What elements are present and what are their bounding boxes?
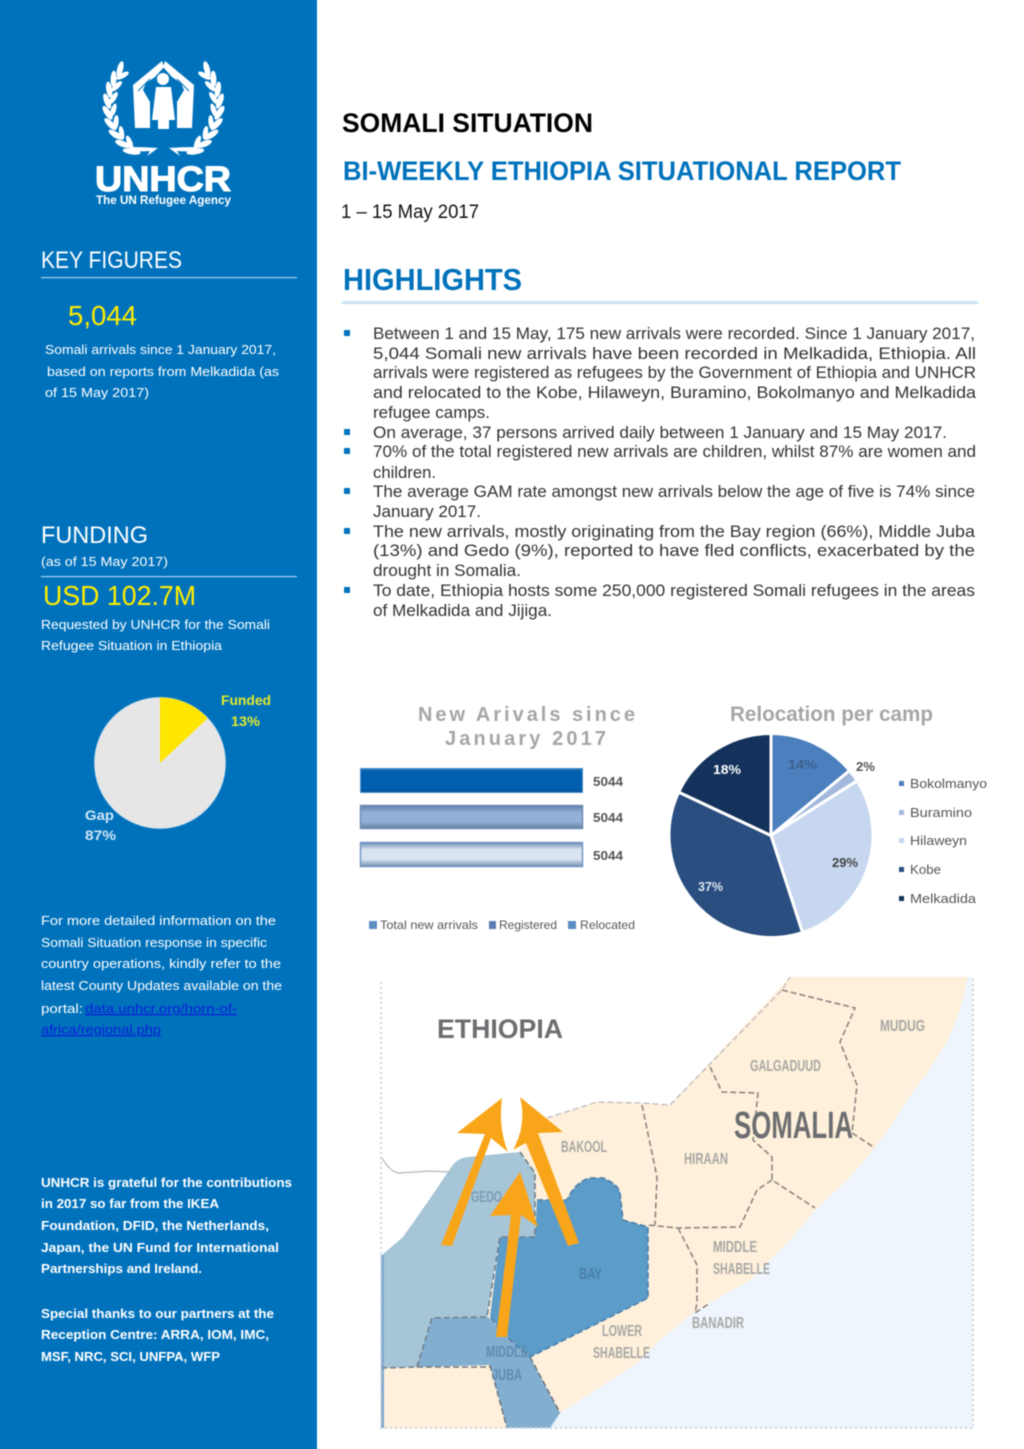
dotted frame: [381, 978, 973, 1428]
left edge strip: [381, 1255, 384, 1428]
text block: highlights list: (13%) and Gedo (9%), reported to have fled conflicts, exacerbated by the: [373, 541, 975, 560]
chart: relocation per camp pie: 18%: [713, 762, 741, 777]
text block: highlights list: On average, 37 persons arrived daily between 1 January and 15 May 2017.: [373, 423, 947, 442]
text: arrivals description: Somali arrivals since 1 January 2017,: [45, 342, 276, 357]
bar: relocated: [360, 842, 582, 866]
legend: camps: Melkadida: [910, 891, 977, 906]
icon: UNHCR logo: UNHCR: [95, 160, 231, 199]
text block: highlights list: arrivals were registered as refugees by the Government of Ethiopia and UNHCR: [373, 363, 976, 382]
text: more information: [41, 913, 282, 1037]
chart: relocation per camp pie: Relocation per camp: [730, 703, 933, 726]
region labels: SHABELLE: [713, 1261, 770, 1278]
text: partner thanks: MSF, NRC, SCI, UNFPA, WFP: [41, 1349, 220, 1364]
text block: highlights list: The new arrivals, mostly originating from the Bay region (66%), Middle Juba: [373, 522, 976, 541]
chart: new arrivals bars: 5044: [593, 774, 624, 789]
arrow: left: [441, 1098, 508, 1246]
text block: highlights list: Between 1 and 15 May, 175 new arrivals were recorded. Since 1 January 2017,: [373, 324, 975, 343]
legend: bars: Relocated: [580, 918, 635, 932]
legend: bars: Total new arrivals: [380, 918, 478, 932]
text: partner thanks: Special thanks to our partners at the: [41, 1306, 274, 1321]
legend: bars: [369, 918, 635, 932]
title: SOMALI SITUATION: [342, 108, 593, 138]
text block: highlights list: [344, 324, 977, 620]
chart: relocation per camp pie: [669, 703, 987, 937]
region labels: SHABELLE: [593, 1345, 650, 1362]
chart: funding pie: 13%: [231, 713, 261, 729]
map: Somalia and southern Ethiopia: [381, 977, 973, 1428]
text: arrivals description: of 15 May 2017): [45, 385, 149, 400]
region labels: MIDDLE: [713, 1239, 757, 1256]
key figure: funding requested: USD 102.7M: [43, 580, 196, 611]
text block: highlights list: refugee camps.: [373, 403, 490, 422]
text: funding description: Refugee Situation in Ethiopia: [41, 638, 223, 653]
chart: funding pie: Gap: [85, 807, 114, 823]
text: acknowledgements: in 2017 so far from the IKEA: [41, 1196, 220, 1211]
text block: highlights list: children.: [373, 463, 436, 482]
regional borders: [382, 977, 875, 1428]
heading: funding: [41, 522, 297, 577]
region: Middle Juba: [417, 1317, 560, 1428]
heading: highlights: HIGHLIGHTS: [343, 262, 522, 297]
text block: highlights list: To date, Ethiopia hosts some 250,000 registered Somali refugees in the areas: [373, 581, 975, 600]
chart: funding pie: Funded: [221, 692, 271, 708]
text: acknowledgements: Japan, the UN Fund for International: [41, 1240, 279, 1255]
region labels: MUDUG: [880, 1018, 925, 1035]
heading: highlights: [342, 262, 978, 304]
chart: relocation per camp pie: 14%: [788, 757, 817, 772]
region labels: BAKOOL: [561, 1139, 607, 1156]
text: funding description: [41, 617, 270, 653]
region: Gedo: [382, 1152, 535, 1368]
text block: highlights list: 5,044 Somali new arrivals have been recorded in Melkadida, Ethiopia. All: [373, 344, 976, 363]
region labels: JUBA: [492, 1367, 522, 1384]
text: funding description: Requested by UNHCR for the Somali: [41, 617, 270, 632]
key figure: arrivals: 5,044: [68, 300, 137, 331]
region labels: MIDDLE: [486, 1344, 528, 1361]
report date: 1 – 15 May 2017: [341, 202, 479, 223]
text: more information: country operations, kindly refer to the: [41, 956, 281, 971]
legend: camps: [899, 776, 987, 906]
sea: [550, 977, 973, 1428]
panel: blue sidebar: [0, 0, 317, 1449]
bar: total new arrivals: [360, 768, 582, 792]
heading: funding: (as of 15 May 2017): [41, 554, 168, 569]
text block: highlights list: drought in Somalia.: [373, 561, 521, 580]
bar: registered: [360, 806, 582, 828]
chart: relocation per camp pie: 29%: [832, 855, 858, 870]
icon: UNHCR logo: [95, 61, 231, 207]
region labels: [471, 1018, 925, 1384]
text block: highlights list: 70% of the total registered new arrivals are children, whilst 87% are women and: [373, 442, 976, 461]
text: more information: latest County Updates available on the: [41, 978, 282, 993]
chart: new arrivals bars: 5044: [593, 848, 624, 863]
region labels: HIRAAN: [684, 1151, 728, 1168]
text: acknowledgements: UNHCR is grateful for the contributions: [41, 1175, 292, 1190]
text: partner thanks: [41, 1306, 274, 1364]
legend: camps: Buramino: [910, 805, 972, 820]
label: Somalia: SOMALIA: [734, 1105, 853, 1147]
arrow: right: [513, 1097, 579, 1246]
text block: highlights list: and relocated to the Kobe, Hilaweyn, Buramino, Bokolmanyo and Melkadida: [373, 383, 977, 402]
text: acknowledgements: Partnerships and Ireland.: [41, 1261, 202, 1276]
legend: camps: Bokolmanyo: [910, 776, 987, 791]
heading: key figures: KEY FIGURES: [41, 247, 182, 274]
legend: camps: Kobe: [910, 862, 941, 877]
ethiopia-kenya border: [382, 1158, 450, 1173]
text: more information: africa/regional.php: [41, 1022, 161, 1037]
legend: bars: Registered: [499, 918, 557, 932]
chart: new arrivals bars: New Arivals since: [418, 704, 635, 726]
subtitle: BI-WEEKLY ETHIOPIA SITUATIONAL REPORT: [343, 156, 901, 186]
region labels: BAY: [579, 1266, 602, 1283]
icon: UNHCR logo: The UN Refugee Agency: [96, 193, 231, 207]
chart: funding pie: [85, 692, 271, 843]
label: Ethiopia: ETHIOPIA: [437, 1014, 563, 1044]
text: arrivals description: [45, 342, 280, 400]
arrow: centre: [490, 1172, 538, 1337]
region labels: LOWER: [602, 1323, 642, 1340]
text: more information: Somali Situation response in specific: [41, 935, 268, 950]
legend: camps: Hilaweyn: [910, 833, 967, 848]
chart: relocation per camp pie: 37%: [698, 879, 723, 894]
land: Somalia: [383, 977, 968, 1428]
region labels: GALGADUUD: [750, 1058, 821, 1075]
region labels: GEDO: [471, 1189, 502, 1206]
region labels: BANADIR: [692, 1315, 744, 1332]
text: arrivals description: based on reports from Melkadida (as: [47, 364, 280, 379]
region: Bay: [490, 1178, 648, 1357]
text: more information: data.unhcr.org/horn-of-: [85, 1001, 237, 1016]
chart: new arrivals bars: January 2017: [445, 728, 606, 750]
chart: funding pie: 87%: [85, 827, 117, 843]
text block: highlights list: January 2017.: [373, 502, 481, 521]
text: acknowledgements: Foundation, DFID, the Netherlands,: [41, 1218, 269, 1233]
chart: new arrivals bars: [360, 704, 635, 932]
text: acknowledgements: [41, 1175, 292, 1276]
text: partner thanks: Reception Centre: ARRA, IOM, IMC,: [41, 1327, 269, 1342]
text block: highlights list: The average GAM rate amongst new arrivals below the age of five is 74% since: [373, 482, 975, 501]
chart: new arrivals bars: 5044: [593, 810, 624, 825]
text: more information: For more detailed information on the: [41, 913, 276, 928]
chart: relocation per camp pie: 2%: [856, 759, 875, 774]
heading: funding: FUNDING: [41, 522, 148, 549]
text block: highlights list: of Melkadida and Jijiga.: [373, 601, 552, 620]
text: more information: portal:: [41, 1001, 83, 1016]
